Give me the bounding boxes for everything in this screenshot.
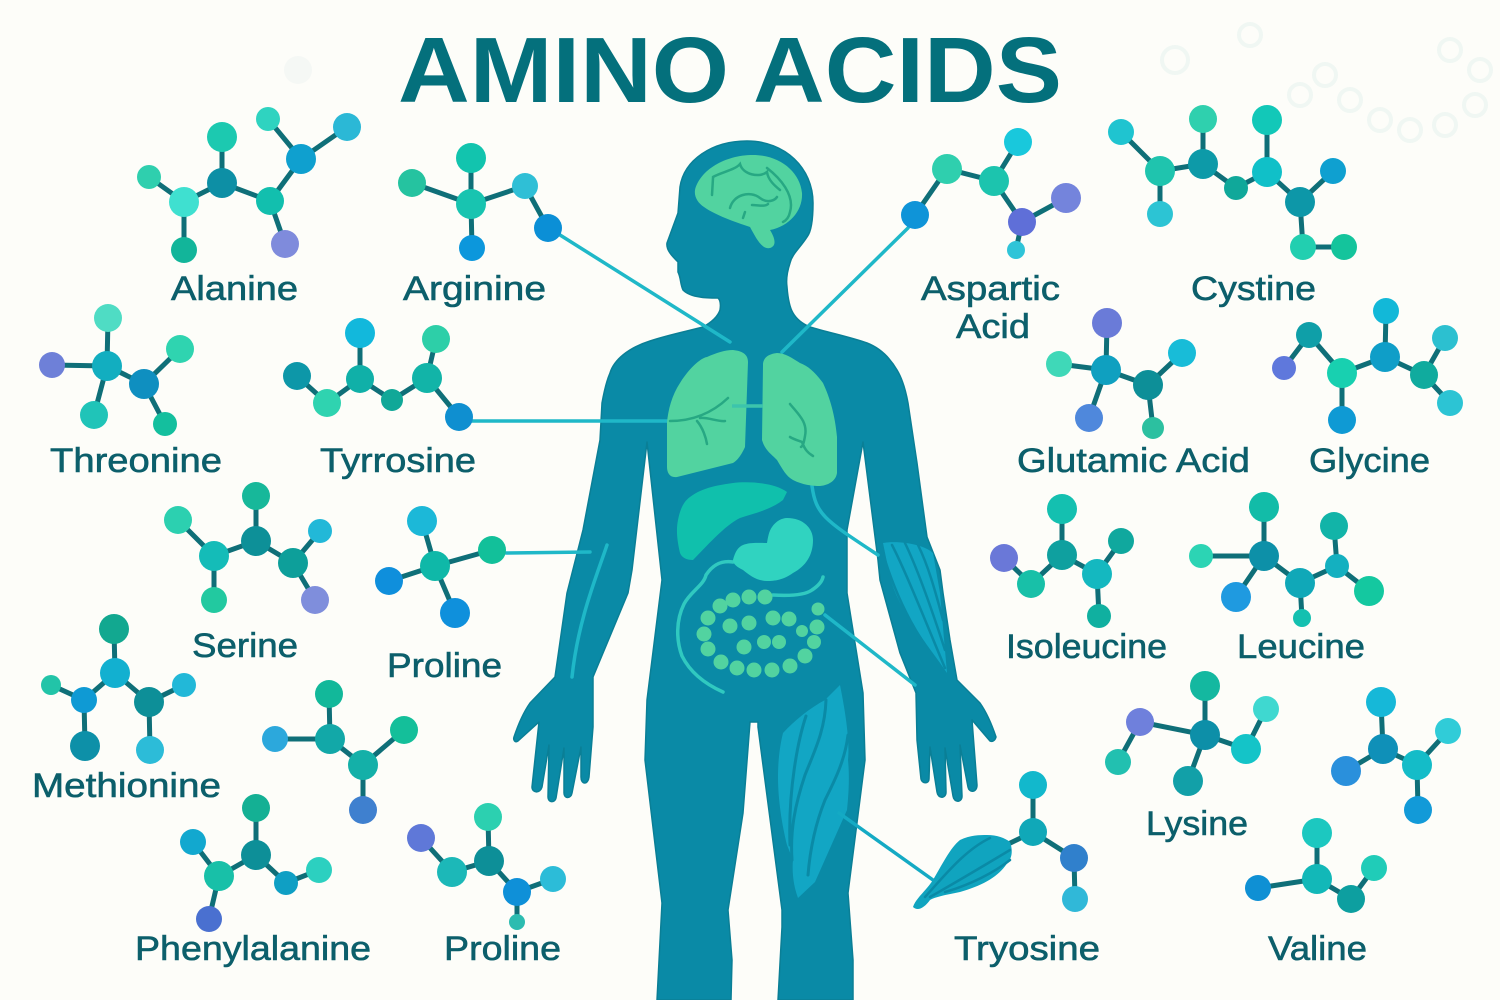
molecule: unnamed right (1331, 687, 1461, 824)
label: Leucine: Leucine (1237, 628, 1365, 666)
molecule: Glutamic Acid (1046, 308, 1196, 439)
label: Valine: Valine (1268, 930, 1367, 968)
molecule: Aspartic Acid (901, 128, 1081, 259)
molecule: Proline (375, 506, 506, 628)
title: AMINO ACIDS (398, 18, 1062, 122)
molecule: Glycine (1272, 298, 1463, 434)
molecule: Threonine (39, 304, 194, 436)
molecule: Alanine (137, 107, 361, 263)
molecule: Valine (1245, 818, 1387, 913)
label: Phenylalanine: Phenylalanine (135, 930, 371, 968)
molecule: Cystine (1108, 105, 1357, 260)
label: Arginine: Arginine (403, 270, 546, 308)
label: Glycine: Glycine (1309, 442, 1430, 480)
molecule: Methionine (41, 614, 196, 764)
connector: thigh to muscle (839, 813, 933, 880)
thigh muscle (778, 685, 849, 898)
label: Proline lower: Proline (444, 930, 561, 968)
icon: isolated muscle (913, 835, 1012, 909)
organ: brain (695, 155, 802, 248)
molecule: Arginine (398, 143, 562, 261)
label: Serine: Serine (192, 627, 298, 665)
label: Isoleucine: Isoleucine (1006, 628, 1167, 666)
label: Tryosine: Tryosine (954, 930, 1100, 968)
molecule: Lysine (1105, 671, 1279, 796)
molecule: unnamed left (262, 680, 418, 824)
molecule: Tyrrosine (283, 318, 473, 431)
connector lines (470, 228, 915, 685)
human body silhouette (514, 141, 996, 1000)
molecule: Serine (164, 482, 332, 614)
molecule: Leucine (1189, 492, 1384, 627)
organ: liver (677, 482, 787, 560)
organ: stomach and tube (678, 518, 823, 692)
molecule: Proline lower (407, 803, 566, 930)
label: Methionine: Methionine (32, 767, 221, 805)
label: Threonine: Threonine (50, 442, 222, 480)
label: Aspartic Acid: Aspartic (921, 270, 1060, 308)
label: Aspartic Acid (921, 270, 1060, 346)
label: Proline: Proline (387, 647, 502, 685)
label: Cystine: Cystine (1191, 270, 1316, 308)
label: Aspartic Acid: Acid (956, 308, 1030, 346)
molecule: Tryosine with muscle (913, 771, 1088, 912)
label: Lysine: Lysine (1146, 805, 1248, 843)
label: Alanine: Alanine (171, 270, 298, 308)
molecule: Isoleucine (990, 494, 1134, 628)
organ: intestines (696, 590, 824, 678)
label: Tyrrosine: Tyrrosine (320, 442, 476, 480)
organ: lungs (667, 350, 837, 486)
forearm muscle (883, 542, 947, 673)
label: Glutamic Acid: Glutamic Acid (1017, 442, 1250, 480)
molecule: Phenylalanine (180, 794, 332, 932)
